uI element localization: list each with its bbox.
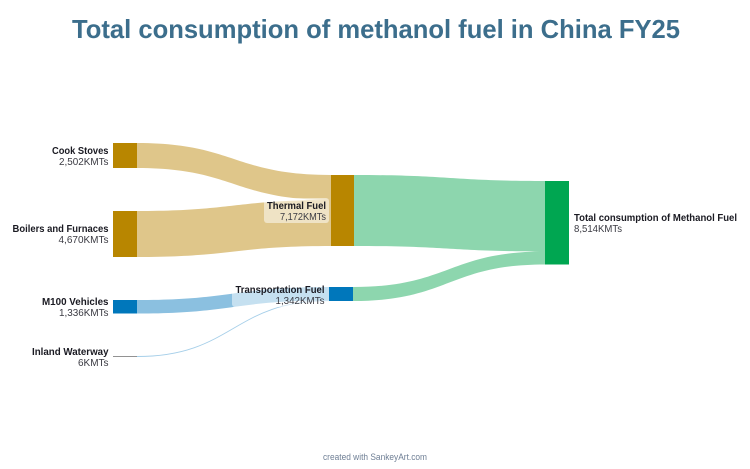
node: Cook Stoves [113,143,137,168]
flow: Inland Waterway to Transportation Fuel [137,301,329,356]
label: Boilers and Furnaces: 4,670KMTs [58,234,108,246]
node: Thermal Fuel [331,175,354,246]
label: Inland Waterway [32,346,109,369]
label: M100 Vehicles [42,296,109,319]
label: Thermal Fuel: Thermal Fuel [267,200,326,212]
label: Boilers and Furnaces: Boilers and Furnaces [12,223,109,235]
label: Total consumption of Methanol Fuel [574,212,737,235]
label: Inland Waterway: 6KMTs [78,357,108,369]
label: Total consumption of Methanol Fuel: Total consumption of Methanol Fuel [574,212,737,224]
label: Transportation Fuel: Transportation Fuel [236,284,325,296]
node: Total consumption of Methanol Fuel [545,181,569,264]
label: Thermal Fuel: 7,172KMTs [280,211,326,223]
flow: Cook Stoves to Thermal Fuel [137,143,331,200]
flow: Boilers and Furnaces to Thermal Fuel [137,200,331,257]
label: Cook Stoves [52,145,109,168]
label: M100 Vehicles: 1,336KMTs [59,307,108,319]
label: Cook Stoves: 2,502KMTs [59,156,108,168]
label: Total consumption of Methanol Fuel: 8,514KMTs [574,223,622,235]
label: Boilers and Furnaces [12,223,109,246]
title: Total consumption of methanol fuel in China FY25 [72,14,680,44]
sankey diagram [113,143,569,357]
flow: M100 Vehicles to Transportation Fuel [137,287,329,314]
label: Inland Waterway: Inland Waterway [32,346,109,358]
node: Transportation Fuel [329,287,353,301]
flow: Thermal Fuel to Total consumption [354,175,545,252]
node: Inland Waterway [113,355,137,358]
label: Transportation Fuel: 1,342KMTs [276,295,324,307]
label: Thermal Fuel [264,198,329,223]
node: M100 Vehicles [113,300,137,314]
label: Cook Stoves: Cook Stoves [52,145,109,157]
footer credit: created with SankeyArt.com [323,452,427,462]
label: Transportation Fuel [232,284,329,307]
label: M100 Vehicles: M100 Vehicles [42,296,109,308]
node: Boilers and Furnaces [113,211,137,257]
flow: Transportation Fuel to Total consumption [353,252,545,301]
